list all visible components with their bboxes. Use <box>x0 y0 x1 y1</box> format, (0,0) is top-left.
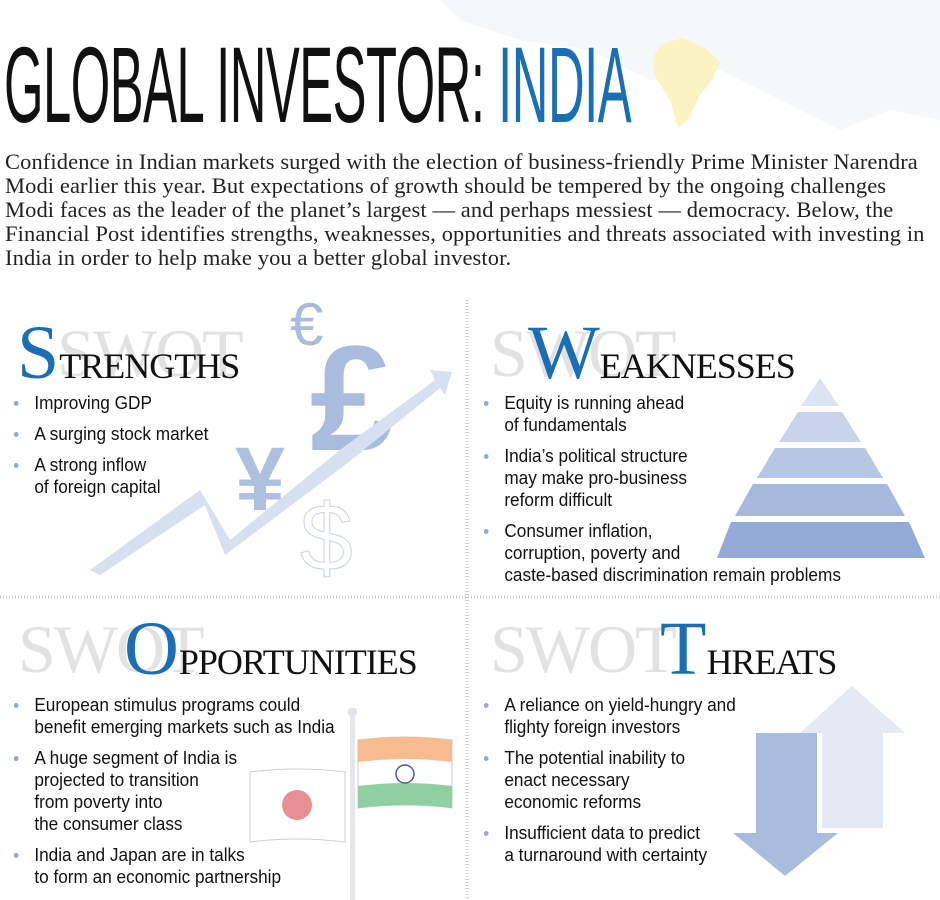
icon: pyramid <box>717 378 925 558</box>
bullet list: of fundamentals <box>504 414 627 435</box>
bullet list: of foreign capital <box>34 476 161 497</box>
bullet list: India and Japan are in talks <box>34 844 245 865</box>
heading: SWOT <box>18 611 203 687</box>
background map <box>440 0 940 130</box>
bullet list <box>14 694 335 887</box>
bullet list: Insufficient data to predict <box>504 822 700 843</box>
heading: SWOT <box>57 315 242 391</box>
bullet list: European stimulus programs could <box>34 694 300 715</box>
panel: opportunities <box>14 607 452 900</box>
bullet list: the consumer class <box>34 813 183 834</box>
bullet list: India’s political structure <box>504 445 688 466</box>
bullet list: enact necessary <box>504 769 630 790</box>
heading: WEAKNESSES <box>528 311 795 395</box>
heading: SWOT <box>490 315 675 391</box>
icon: currency chart: $ <box>300 485 353 591</box>
panel: threats <box>484 607 905 876</box>
icon: flags <box>250 708 452 900</box>
icon: arrows <box>733 686 905 876</box>
bullet list: A strong inflow <box>34 454 146 475</box>
icon: currency chart <box>90 300 452 591</box>
bullet list: The potential inability to <box>504 747 685 768</box>
heading: SWOT <box>490 611 675 687</box>
bullet list: A surging stock market <box>34 423 208 444</box>
bullet list: from poverty into <box>34 791 162 812</box>
bullet list: flighty foreign investors <box>504 716 680 737</box>
bullet list: caste-based discrimination remain problems <box>504 564 841 585</box>
bullet list: may make pro-business <box>504 467 687 488</box>
icon: currency chart: £ <box>310 314 393 482</box>
heading: OPPORTUNITIES <box>124 607 417 691</box>
bullet list: A reliance on yield-hungry and <box>504 694 736 715</box>
intro text: Confidence in Indian markets surged with the election of business-friendly Prime Minister Narendra Modi earlier this year. But expectations of growth should be tempered by the ongoing challenges Modi faces as the leader of the planet’s largest — and perhaps messiest — democracy. Below, the Financial Post identifies strengths, weaknesses, opportunities and threats associated with investing in India in order to help make you a better global investor. <box>5 149 925 270</box>
heading <box>490 607 836 691</box>
bullet list: Equity is running ahead <box>504 392 684 413</box>
panel: strengths <box>14 300 452 591</box>
bullet list: a turnaround with certainty <box>504 844 707 865</box>
panel: weaknesses <box>484 311 925 585</box>
bullet list <box>484 392 841 585</box>
bullet list: corruption, poverty and <box>504 542 680 563</box>
icon: currency chart: ¥ <box>235 430 285 530</box>
bullet list: A huge segment of India is <box>34 747 237 768</box>
heading: STRENGTHS <box>17 311 239 395</box>
bullet list: projected to transition <box>34 769 199 790</box>
bullet list: reform difficult <box>504 489 612 510</box>
title: GLOBAL INVESTOR: INDIA <box>4 24 631 145</box>
bullet list: economic reforms <box>504 791 641 812</box>
bullet list: Consumer inflation, <box>504 520 653 541</box>
heading: THREATS <box>660 607 836 691</box>
bullet list: benefit emerging markets such as India <box>34 716 335 737</box>
bullet list <box>14 392 208 497</box>
bullet list <box>484 694 736 865</box>
bullet list: Improving GDP <box>34 392 152 413</box>
bullet list: to form an economic partnership <box>34 866 281 887</box>
